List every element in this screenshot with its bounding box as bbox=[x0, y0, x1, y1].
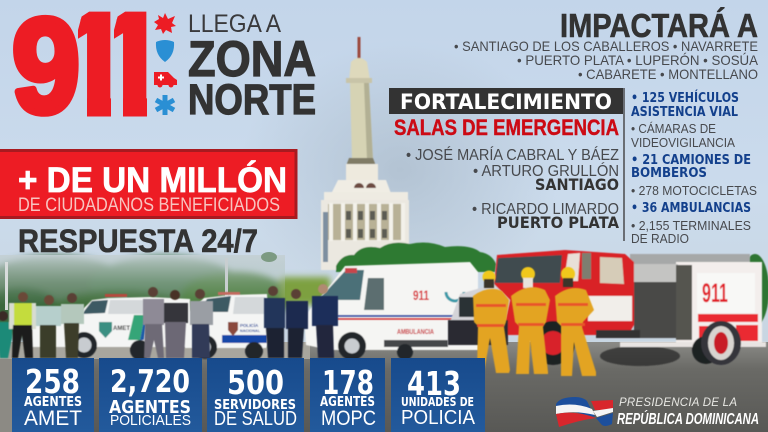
title: llega a zona norte bbox=[188, 10, 316, 124]
panel: equipment list: ASISTENCIA VIAL bbox=[631, 105, 738, 120]
panel: fortalecimiento salas de emergencia bbox=[389, 88, 623, 232]
logo: 911 bbox=[13, 12, 147, 117]
fire truck: 911 bbox=[702, 278, 728, 308]
title: llega a zona norte: NORTE bbox=[188, 76, 316, 124]
heading: respuesta 24/7: RESPUESTA 24/7 bbox=[18, 223, 258, 259]
monument bbox=[321, 37, 496, 272]
banner: mas de un millon: + DE UN MILLÓN bbox=[18, 160, 287, 200]
panel: equipment list: BOMBEROS bbox=[631, 166, 707, 181]
panel: fortalecimiento salas de emergencia: SALAS DE EMERGENCIA bbox=[394, 115, 619, 140]
logo: presidencia de la republica dominicana: PRESIDENCIA DE LA bbox=[619, 397, 737, 409]
stat: 2,720 agentes policiales: POLICIALES bbox=[110, 412, 191, 429]
stat: 413 unidades de policia: 413 bbox=[407, 364, 461, 403]
ground and road bbox=[0, 342, 768, 432]
stat: 178 agentes mopc bbox=[310, 358, 385, 432]
panel: equipment list: • 21 CAMIONES DE bbox=[631, 153, 751, 168]
panel: impactara a: • CABARETE • MONTELLANO bbox=[578, 66, 758, 82]
panel: fortalecimiento salas de emergencia: • ARTURO GRULLÓN bbox=[473, 161, 619, 180]
stat: 2,720 agentes policiales: 2,720 bbox=[110, 364, 190, 400]
icon: red ambulance bbox=[154, 72, 177, 88]
panel: equipment list: • CÁMARAS DE bbox=[631, 121, 716, 136]
stat: 258 agentes amet: 258 bbox=[25, 362, 80, 401]
panel: fortalecimiento salas de emergencia: • RICARDO LIMARDO bbox=[472, 201, 619, 218]
stat: 258 agentes amet: AGENTES bbox=[24, 395, 82, 410]
trees and lawn background bbox=[0, 252, 768, 337]
panel: equipment list: • 2,155 TERMINALES bbox=[631, 218, 751, 233]
ambulance bbox=[305, 262, 478, 360]
stat: 500 servidores de salud: SERVIDORES bbox=[214, 398, 296, 413]
stat: 178 agentes mopc: 178 bbox=[322, 363, 374, 402]
title: llega a zona norte: LLEGA A bbox=[188, 10, 281, 38]
firefighters bbox=[473, 267, 596, 376]
divider line bbox=[623, 88, 625, 241]
police pickup: POLICÍA bbox=[240, 321, 259, 328]
icon: red cross bbox=[154, 13, 176, 34]
panel: fortalecimiento salas de emergencia: SANTIAGO bbox=[535, 175, 619, 194]
panel: equipment list bbox=[631, 90, 757, 246]
icons: emergency services bbox=[154, 13, 177, 115]
banner: mas de un millon bbox=[0, 150, 296, 218]
AMET pickup: AMET bbox=[113, 326, 130, 332]
fire truck bbox=[448, 250, 766, 366]
AMET pickup bbox=[30, 294, 192, 360]
panel: impactara a bbox=[454, 7, 759, 82]
panel: impactara a: • PUERTO PLATA • LUPERÓN • SOSÚA bbox=[517, 52, 759, 68]
panel: equipment list: • 278 MOTOCICLETAS bbox=[631, 183, 757, 198]
ambulance: AMBULANCIA bbox=[397, 329, 434, 336]
police pickup: NACIONAL bbox=[240, 329, 261, 333]
panel: equipment list: • 125 VEHÍCULOS bbox=[631, 90, 739, 106]
stat: 500 servidores de salud bbox=[207, 358, 304, 432]
panel: equipment list: VIDEOVIGILANCIA bbox=[631, 135, 735, 150]
stat: 258 agentes amet: AMET bbox=[24, 407, 82, 430]
panel: fortalecimiento salas de emergencia: FORTALECIMIENTO bbox=[400, 90, 612, 114]
stat: 178 agentes mopc: AGENTES bbox=[320, 395, 375, 410]
panel: fortalecimiento salas de emergencia: • JOSÉ MARÍA CABRAL Y BÁEZ bbox=[406, 145, 619, 164]
stat: 413 unidades de policia bbox=[391, 358, 485, 432]
banner: mas de un millon: DE CIUDADANOS BENEFICIADOS bbox=[18, 195, 280, 216]
stat: 413 unidades de policia: UNIDADES DE bbox=[401, 395, 474, 409]
officers bbox=[0, 284, 338, 358]
icon: dominican flag bbox=[556, 397, 613, 427]
logo: presidencia de la republica dominicana bbox=[556, 397, 759, 428]
stat: 2,720 agentes policiales: AGENTES bbox=[109, 397, 191, 418]
stat: 178 agentes mopc: MOPC bbox=[321, 407, 376, 430]
title: llega a zona norte: ZONA bbox=[188, 31, 316, 87]
ambulance: 911 bbox=[413, 287, 429, 303]
stat: 413 unidades de policia: POLICIA bbox=[401, 407, 476, 429]
panel: fortalecimiento salas de emergencia: PUERTO PLATA bbox=[497, 213, 620, 232]
stat: 2,720 agentes policiales bbox=[99, 358, 202, 432]
police pickup bbox=[185, 292, 270, 360]
stat: 500 servidores de salud: DE SALUD bbox=[214, 408, 297, 430]
stat: 258 agentes amet bbox=[12, 358, 94, 432]
stat: 500 servidores de salud: 500 bbox=[227, 363, 284, 402]
panel: equipment list: DE RADIO bbox=[631, 231, 689, 246]
icon: star of life bbox=[156, 95, 174, 115]
icon: blue shield bbox=[156, 40, 174, 62]
